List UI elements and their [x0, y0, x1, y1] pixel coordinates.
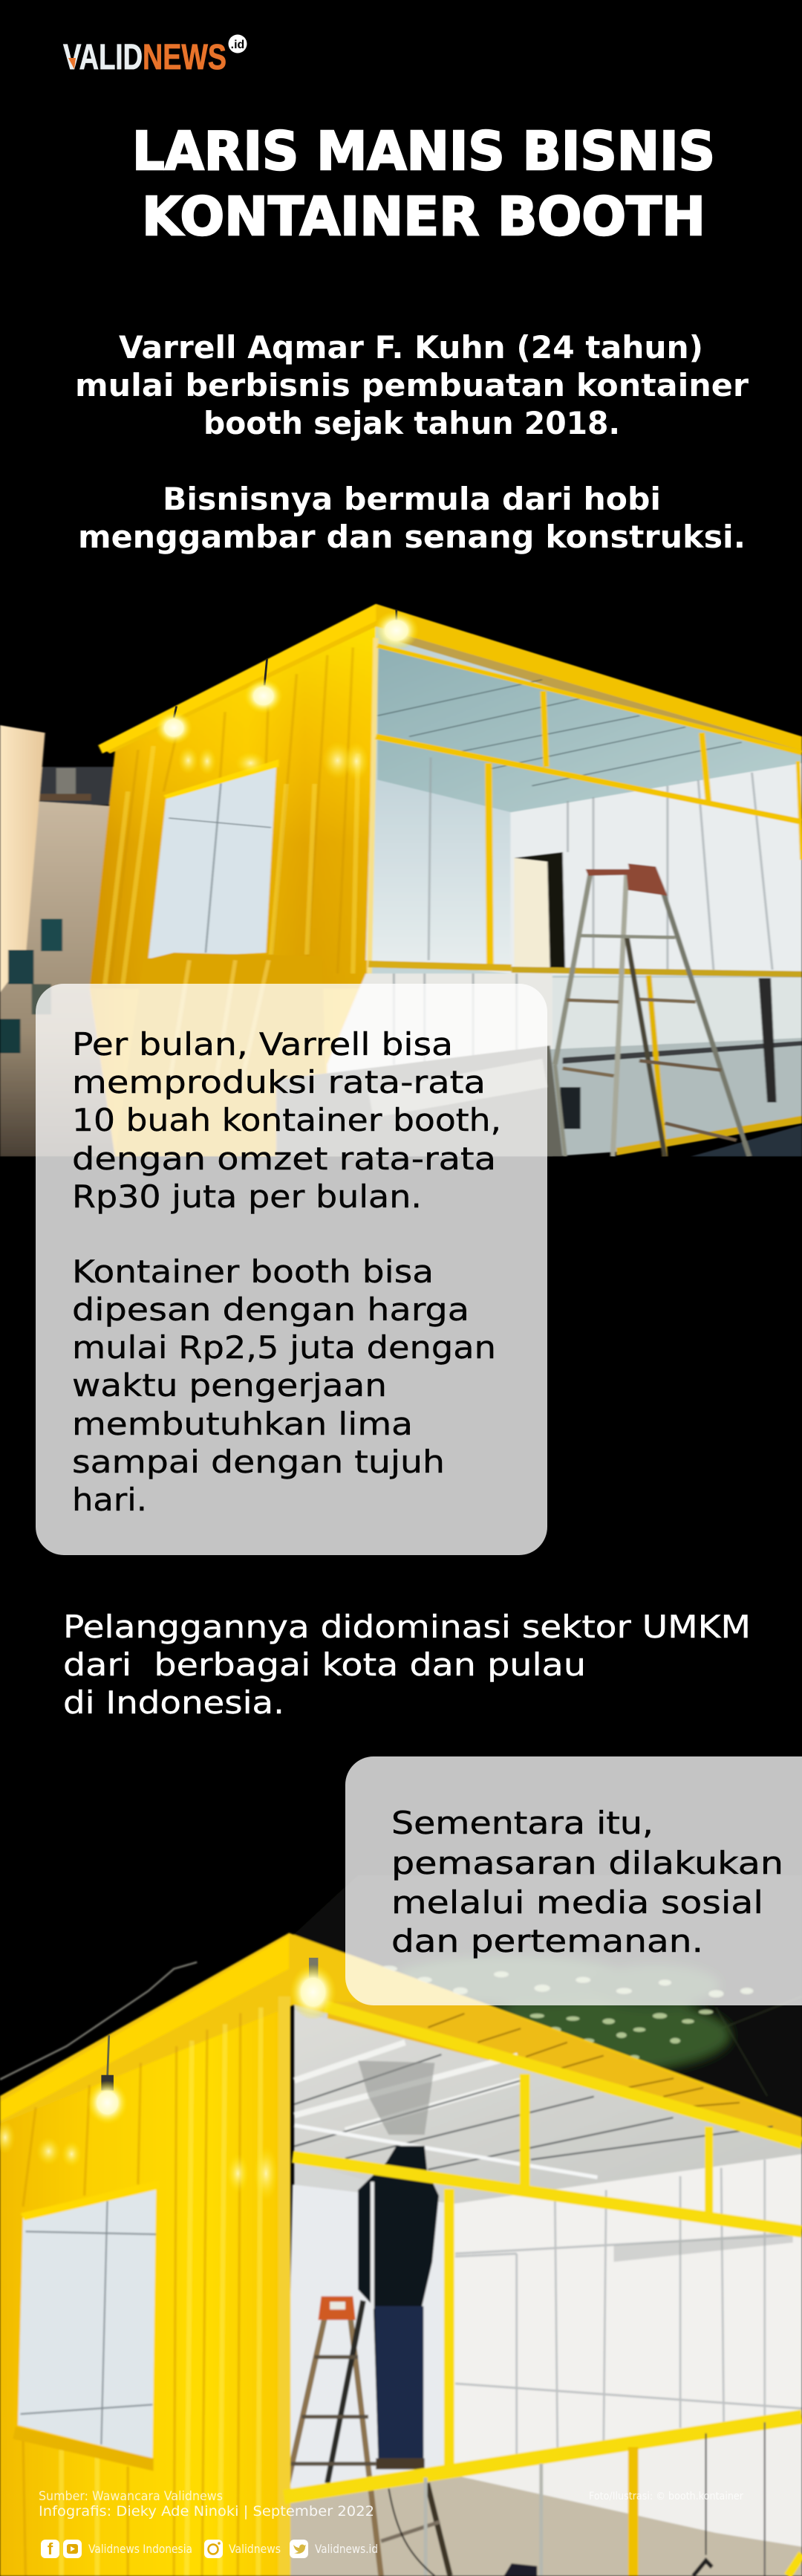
text: customers	[63, 1609, 751, 1721]
icon: instagram	[204, 2540, 223, 2558]
text: customers: dari berbagai kota dan pulau	[63, 1647, 586, 1683]
photo: yellow container booth with worker	[0, 1875, 802, 2576]
card text: production: memproduksi rata-rata	[72, 1064, 486, 1100]
panel: production and price card	[36, 984, 547, 1555]
footer: credits: Sumber: Wawancara Validnews	[39, 2489, 223, 2504]
panel: marketing card	[345, 1756, 802, 2005]
card text: production: mulai Rp2,5 juta dengan	[72, 1329, 496, 1366]
icon: twitter	[290, 2540, 308, 2558]
title	[132, 120, 715, 247]
footer: credits	[39, 2489, 743, 2520]
card text: marketing: melalui media sosial	[391, 1884, 763, 1921]
card text: production: dengan omzet rata-rata	[72, 1141, 496, 1177]
logo: Validnews.id: NEWS	[143, 38, 226, 77]
text: customers: Pelanggannya didominasi sektor UMKM	[63, 1609, 751, 1645]
card text: production: hari.	[72, 1482, 147, 1518]
intro text: menggambar dan senang konstruksi.	[78, 519, 746, 555]
intro text: Bisnisnya bermula dari hobi	[163, 481, 661, 517]
icon: youtube	[63, 2540, 82, 2558]
card text: marketing: Sementara itu,	[391, 1805, 653, 1841]
footer: credits: Infografis: Dieky Ade Ninoki | September 2022	[39, 2503, 374, 2520]
photo: yellow container booth, side view	[0, 604, 802, 1157]
intro text: Varrell Aqmar F. Kuhn (24 tahun)	[119, 329, 703, 366]
logo: Validnews.id: VALID	[63, 38, 143, 77]
card text: production: Kontainer booth bisa	[72, 1253, 434, 1290]
card text: marketing	[391, 1805, 783, 1959]
card text: production: dipesan dengan harga	[72, 1291, 469, 1328]
footer: social media	[41, 2540, 378, 2558]
label: Validnews: Validnews	[229, 2542, 281, 2556]
label: Validnews.id: Validnews.id	[315, 2542, 378, 2556]
card text: production: Per bulan, Varrell bisa	[72, 1026, 453, 1062]
card text: production: Rp30 juta per bulan.	[72, 1178, 422, 1215]
card text: production	[72, 1026, 501, 1518]
footer: credits: Foto/Ilustrasi: © booth.kontainer	[589, 2491, 743, 2502]
logo: Validnews.id	[63, 34, 247, 77]
card text: marketing: pemasaran dilakukan	[391, 1845, 783, 1881]
label: Validnews Indonesia: Validnews Indonesia	[88, 2542, 192, 2556]
intro text: booth sejak tahun 2018.	[203, 405, 620, 441]
card text: production: waktu pengerjaan	[72, 1367, 387, 1404]
text: customers: di Indonesia.	[63, 1684, 284, 1721]
intro text: mulai berbisnis pembuatan kontainer	[75, 367, 749, 403]
icon: facebook: f	[48, 2540, 53, 2558]
intro text	[75, 329, 749, 555]
card text: production: sampai dengan tujuh	[72, 1444, 445, 1480]
card text: marketing: dan pertemanan.	[391, 1923, 703, 1959]
icon: facebook	[41, 2540, 59, 2558]
card text: production: membutuhkan lima	[72, 1406, 413, 1442]
title: LARIS MANIS BISNIS	[132, 120, 715, 182]
logo: Validnews.id: .id	[231, 39, 244, 51]
roof underside and interior backing	[368, 621, 802, 977]
card text: production: 10 buah kontainer booth,	[72, 1102, 501, 1138]
title: KONTAINER BOOTH	[142, 186, 705, 247]
